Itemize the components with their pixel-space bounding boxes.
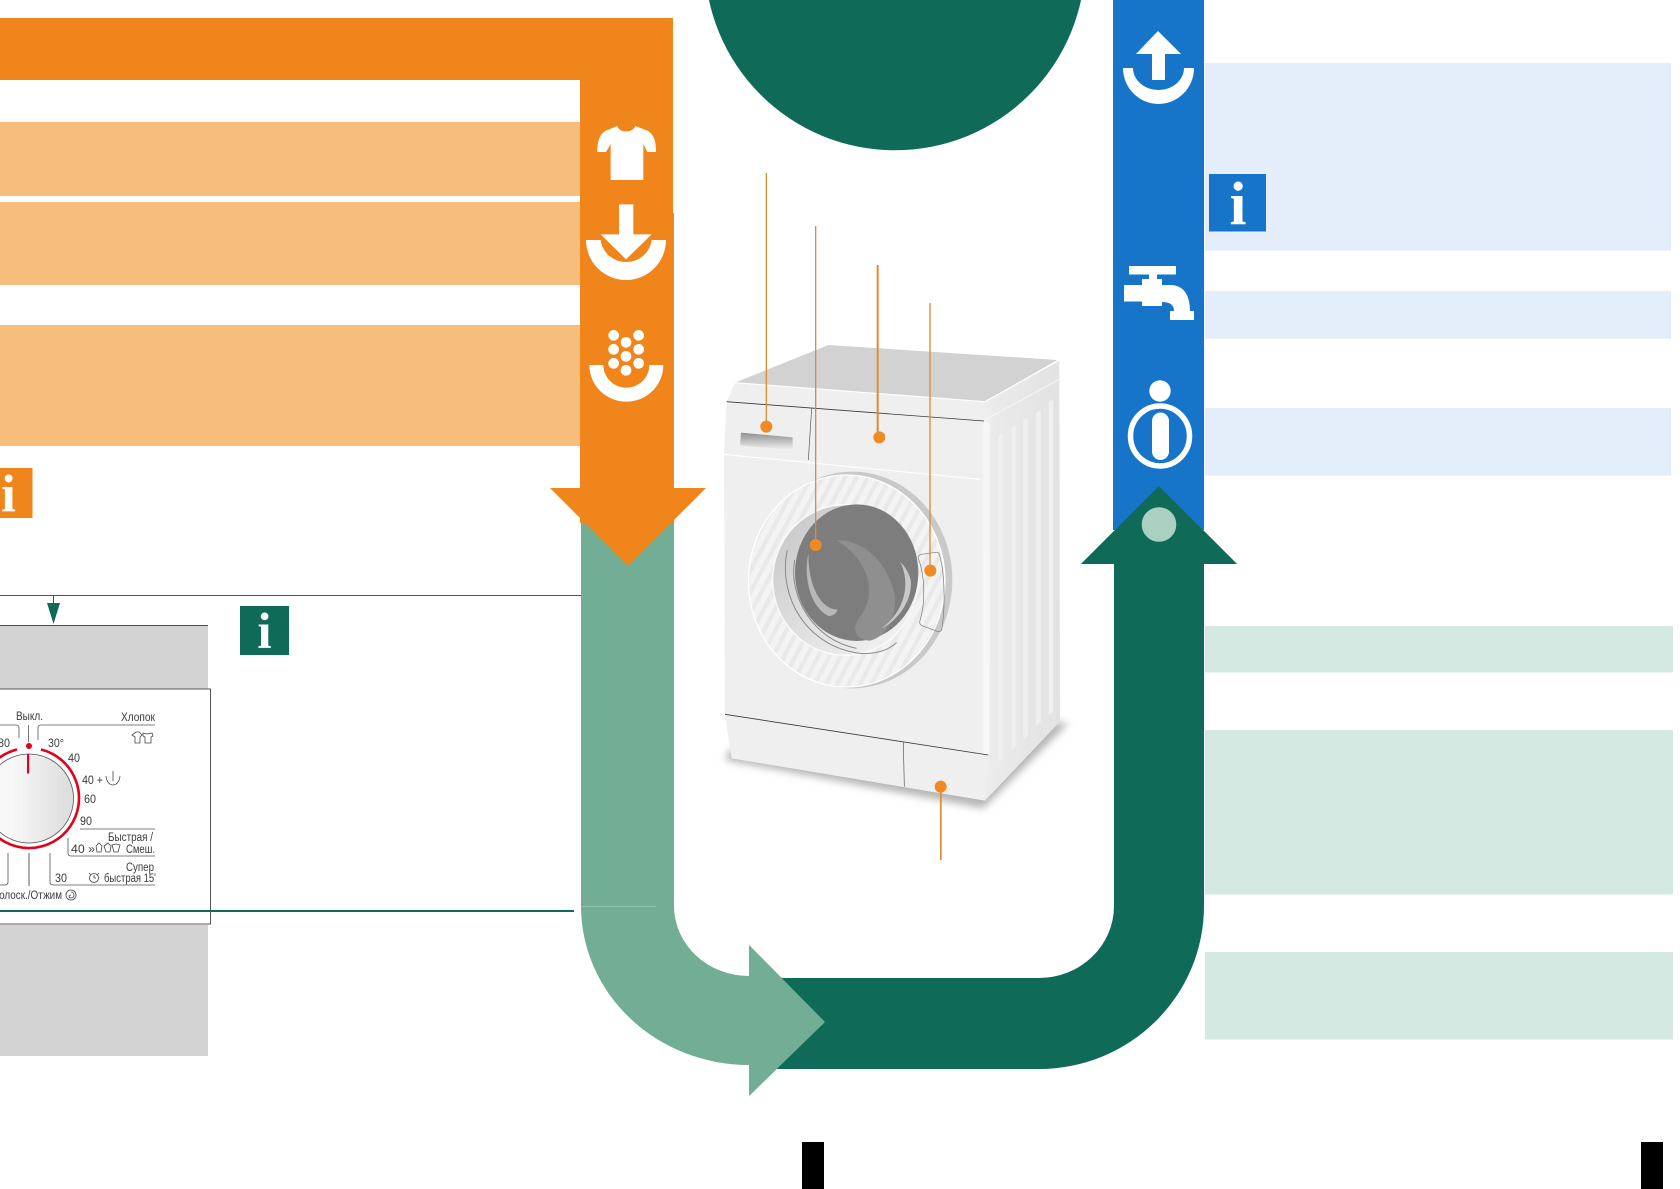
pointer arrow: [47, 595, 60, 624]
drum inner arcs: [785, 550, 897, 653]
detergent drawer slot: [740, 433, 793, 450]
dial linework: [0, 725, 155, 886]
callout lines and markers: [760, 173, 947, 860]
green info box: [240, 604, 289, 660]
black page markers: [802, 1142, 1663, 1189]
top face: [735, 345, 1057, 402]
gray background blocks: [0, 626, 208, 1056]
dial labels: [0, 711, 156, 902]
icon: load detergent arrow: [586, 204, 666, 280]
icon: dots in bowl: [589, 330, 663, 402]
blue vertical bar: [1113, 0, 1204, 530]
marker: door handle: [924, 303, 936, 577]
dark green up arrow head: [1081, 486, 1237, 564]
blue text panels: [1205, 63, 1671, 476]
dial labels: Смеш.: [126, 844, 155, 856]
section bottom rule: [0, 910, 574, 912]
blue info box: i: [1230, 171, 1247, 238]
gray rule: [0, 625, 208, 626]
dial labels: быстрая 15': [104, 873, 156, 885]
dial labels: 90: [80, 816, 92, 828]
orange header band and down arrow: [0, 18, 706, 566]
seam on light green arrow: [581, 906, 656, 907]
drum glass: [795, 504, 918, 641]
front face: [724, 383, 990, 801]
marker: control panel: [873, 265, 885, 443]
drum reflections: [807, 540, 911, 641]
door ring: [748, 475, 945, 687]
light circle on arrow head: [1142, 507, 1176, 542]
orange text panels: [0, 122, 580, 446]
dial labels: 40: [68, 753, 80, 765]
program selector section: [0, 595, 581, 1056]
front edge highlight: [983, 422, 990, 755]
side ribs: [998, 399, 1053, 762]
marker: drawer: [760, 173, 772, 433]
icon: information person: [1130, 380, 1190, 466]
top dark green circle: [705, 0, 1085, 150]
dial labels: Хлопок: [121, 712, 156, 724]
dial labels: 30°: [48, 738, 64, 750]
control panel card: [0, 689, 210, 924]
dial labels: Супер: [126, 862, 154, 874]
door handle: [918, 552, 944, 632]
dial labels: 40 +: [82, 775, 103, 787]
section top rule: [0, 595, 581, 596]
light green flow arrow: [581, 213, 825, 1096]
dial labels: Быстрая /: [108, 832, 154, 844]
red dial ring: [0, 750, 79, 848]
small program symbols: [66, 732, 153, 900]
blue column icons: [1123, 31, 1194, 466]
marker: service flap: [935, 781, 947, 860]
dial labels: 40 »: [71, 844, 95, 856]
dial knob: [0, 754, 74, 843]
machine outlines: [723, 361, 1059, 787]
green info box: i: [257, 604, 272, 660]
marker: drum: [810, 226, 822, 551]
green text panels: [1205, 626, 1673, 1040]
light green arrowhead over dark band: [749, 945, 825, 1096]
dial labels: 60: [84, 794, 96, 806]
orange info box: [0, 466, 32, 524]
washing machine illustration: [723, 173, 1068, 860]
orange column icons: [586, 126, 666, 402]
door inner ring: [773, 505, 918, 655]
dial labels: Выкл.: [16, 711, 43, 723]
icon: water tap: [1124, 266, 1194, 320]
orange info box: i: [1, 466, 16, 524]
icon: up arrow with bowl: [1123, 31, 1194, 104]
side face: [985, 361, 1060, 801]
blue info box: [1209, 171, 1266, 238]
icon: shirt: [597, 126, 656, 180]
door shadow: [752, 472, 952, 688]
shadow: [725, 720, 1068, 808]
dial labels: 30: [55, 873, 67, 885]
dial pointer: [26, 743, 32, 774]
dark green flow arrow: [749, 486, 1237, 1069]
